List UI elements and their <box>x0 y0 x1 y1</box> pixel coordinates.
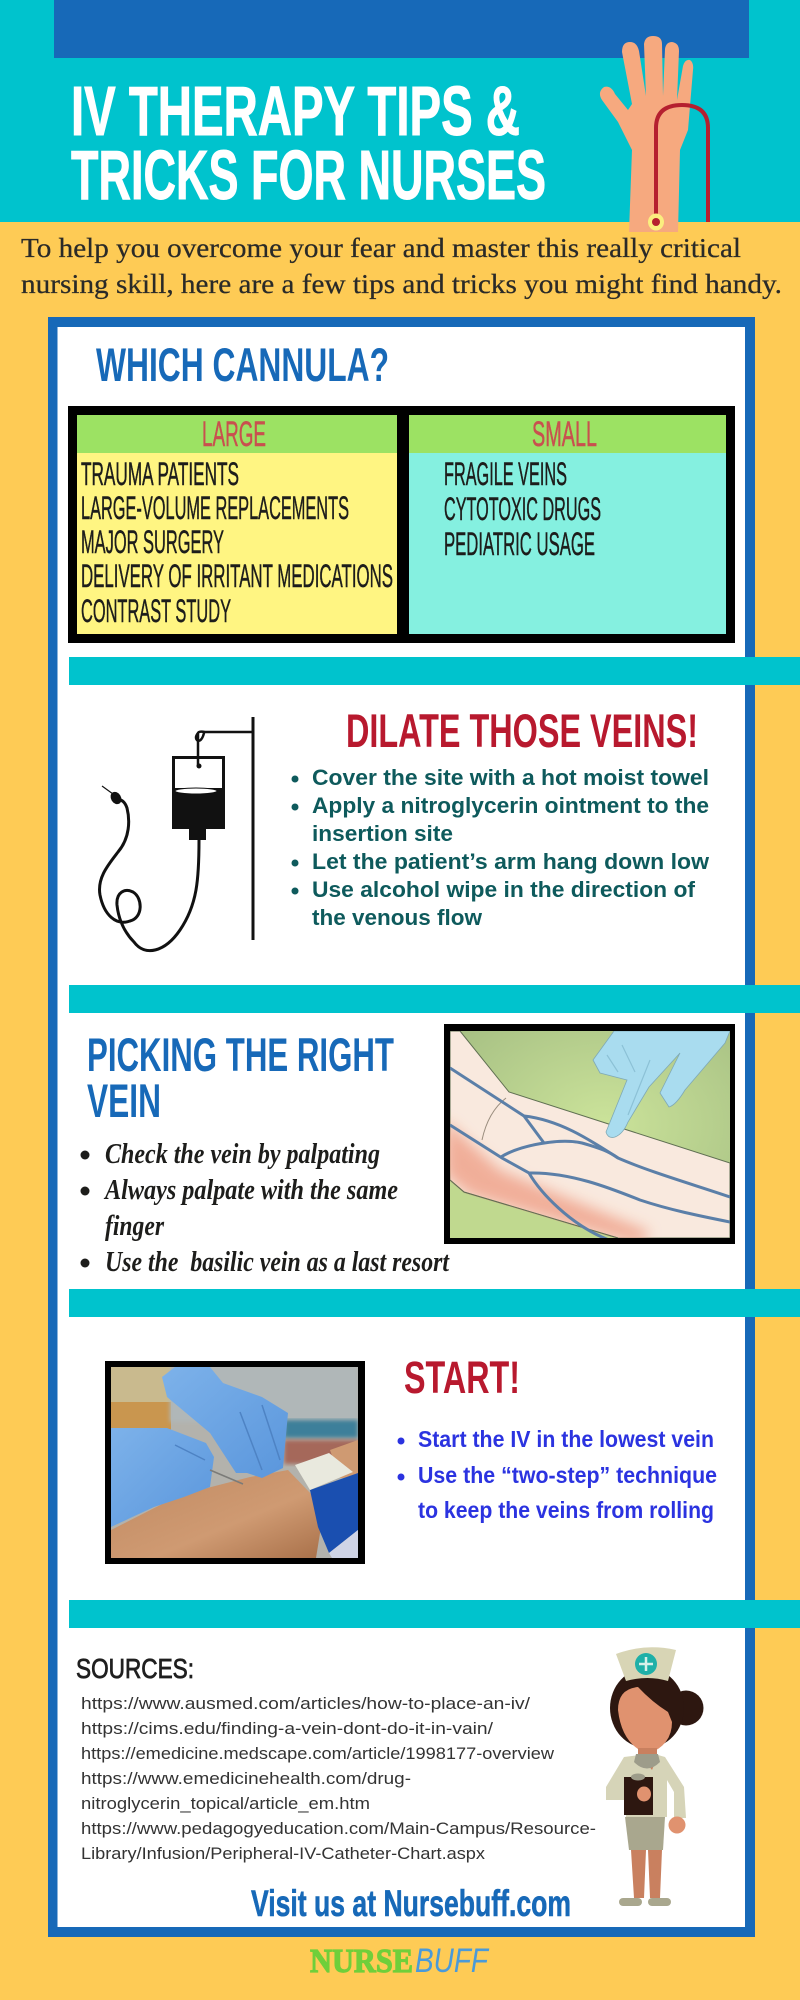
list: vein tips: Check the vein by palpating <box>105 1139 380 1170</box>
illustration: nurse <box>606 1647 704 1906</box>
icon: hand with IV line <box>600 36 708 232</box>
intro text: nursing skill, here are a few tips and tricks you might find handy. <box>21 269 782 299</box>
teal divider 3 <box>69 1289 800 1317</box>
website link: Visit us at Nursebuff.com <box>251 1883 571 1924</box>
small cannula uses <box>444 456 601 562</box>
list: start tips: to keep the veins from rolling <box>418 1497 714 1523</box>
teal divider 1 <box>69 657 800 685</box>
teal divider 2 <box>69 985 800 1013</box>
list: start tips: Use the “two-step” technique <box>418 1462 717 1488</box>
logo: NurseBuff: NURSE <box>310 1943 413 1980</box>
list: vein tips: Use the basilic vein as a last resort <box>105 1247 450 1278</box>
list: dilate tips <box>292 765 710 930</box>
table: cannula sizes <box>68 406 735 643</box>
heading: sources: SOURCES: <box>76 1653 194 1684</box>
title <box>71 72 546 214</box>
source links: https://cims.edu/finding-a-vein-dont-do-it-in-vain/ <box>81 1719 493 1738</box>
image: nurse inserting IV <box>105 1361 365 1564</box>
panel frame <box>48 317 755 1937</box>
large cannula uses: MAJOR SURGERY <box>81 524 224 560</box>
small cannula uses: CYTOTOXIC DRUGS <box>444 491 601 527</box>
title: TRICKS FOR NURSES <box>71 136 546 214</box>
list: dilate tips: the venous flow <box>312 905 483 930</box>
logo: NurseBuff: BUFF <box>415 1942 490 1980</box>
title: IV THERAPY TIPS & <box>71 72 520 150</box>
list: vein tips: finger <box>105 1211 165 1242</box>
logo: NurseBuff <box>310 1942 490 1980</box>
icon: IV drip stand <box>99 717 253 951</box>
intro text: To help you overcome your fear and master this really critical <box>21 233 741 263</box>
intro text <box>21 233 782 299</box>
list: start tips: Start the IV in the lowest vein <box>418 1426 714 1452</box>
large cannula uses: TRAUMA PATIENTS <box>81 456 239 492</box>
large cannula uses: CONTRAST STUDY <box>81 593 231 629</box>
source links: https://emedicine.medscape.com/article/1998177-overview <box>81 1744 555 1763</box>
list: vein tips <box>80 1139 450 1278</box>
image: arm veins and gloved finger <box>444 1024 735 1245</box>
source links: https://www.ausmed.com/articles/how-to-place-an-iv/ <box>81 1694 530 1713</box>
list: start tips <box>398 1426 717 1523</box>
small cannula uses: FRAGILE VEINS <box>444 456 567 492</box>
list: dilate tips: Let the patient’s arm hang down low <box>312 849 710 874</box>
large cannula uses: DELIVERY OF IRRITANT MEDICATIONS <box>81 558 393 594</box>
large cannula uses: LARGE-VOLUME REPLACEMENTS <box>81 490 349 526</box>
heading: picking the right vein <box>87 1028 394 1127</box>
source links <box>81 1694 596 1863</box>
column heading: large: LARGE <box>202 415 266 454</box>
teal divider 4 <box>69 1600 800 1628</box>
column heading: small: SMALL <box>532 415 597 454</box>
source links: https://www.pedagogyeducation.com/Main-Campus/Resource- <box>81 1819 596 1838</box>
list: vein tips: Always palpate with the same <box>103 1175 398 1206</box>
small cannula uses: PEDIATRIC USAGE <box>444 526 595 562</box>
heading: which cannula: WHICH CANNULA? <box>96 338 389 391</box>
source links: Library/Infusion/Peripheral-IV-Catheter-Chart.aspx <box>81 1844 486 1863</box>
header band <box>0 0 800 222</box>
list: dilate tips: Use alcohol wipe in the direction of <box>312 877 696 902</box>
large cannula uses <box>81 456 393 629</box>
list: dilate tips: Cover the site with a hot moist towel <box>312 765 709 790</box>
list: dilate tips: insertion site <box>312 821 453 846</box>
source links: nitroglycerin_topical/article_em.htm <box>81 1794 370 1813</box>
list: dilate tips: Apply a nitroglycerin ointment to the <box>312 793 709 818</box>
heading: picking the right vein: VEIN <box>87 1074 161 1127</box>
source links: https://www.emedicinehealth.com/drug- <box>81 1769 411 1788</box>
heading: picking the right vein: PICKING THE RIGHT <box>87 1028 394 1081</box>
heading: start: START! <box>404 1352 520 1403</box>
